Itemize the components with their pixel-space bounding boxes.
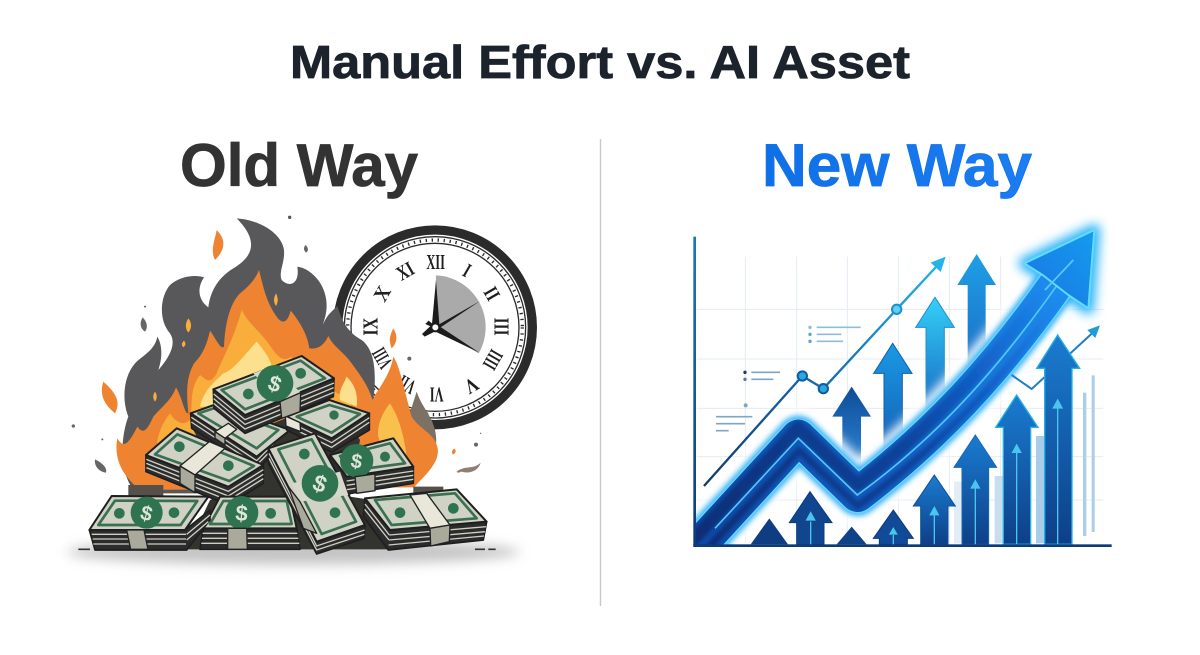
ground shadow	[67, 539, 520, 565]
heading: old way: Old Way	[180, 132, 419, 199]
clock numerals: XII	[426, 252, 445, 274]
arrow outline	[693, 285, 1056, 552]
clock numerals: IIII	[478, 345, 507, 373]
clock hands	[422, 280, 481, 353]
clock numerals: III	[489, 318, 511, 336]
money stack: bottom center	[200, 496, 300, 549]
illustration: growth chart	[687, 230, 1112, 557]
clock numerals: IX	[360, 318, 382, 336]
inner thin arrows	[807, 400, 1062, 544]
money stack: top: $	[265, 370, 285, 398]
clock numerals: II	[479, 283, 504, 305]
smoke right	[403, 392, 436, 463]
illustration: burning money and clock	[67, 216, 532, 565]
flames	[116, 270, 438, 490]
white halo	[700, 308, 1074, 540]
flying embers and ash	[72, 216, 481, 473]
arrow dark core lower	[705, 328, 1038, 544]
divider	[600, 139, 602, 606]
clock numerals: XI	[393, 258, 418, 286]
rear up arrows	[832, 254, 996, 473]
clock numerals: X	[370, 282, 396, 306]
chart note lines	[716, 326, 861, 431]
arrow body	[693, 285, 1056, 552]
money stack: rear left	[191, 404, 290, 470]
clock numerals: V	[460, 372, 482, 398]
front up arrows	[751, 335, 1080, 544]
pale background bars	[954, 375, 1095, 543]
money stack: middle left	[146, 428, 263, 505]
money stack: middle right	[330, 438, 413, 494]
elapsed time sector	[435, 275, 486, 353]
title: Manual Effort vs. AI Asset	[290, 36, 910, 88]
clock numerals: VI	[430, 383, 444, 405]
cyan glow	[693, 285, 1056, 552]
dark fill between stacks	[187, 400, 390, 549]
money stack: top	[213, 356, 334, 433]
main glowing arrow	[687, 230, 1094, 557]
clock numerals	[360, 252, 511, 405]
money stack: bottom left	[89, 496, 210, 550]
heading: new way: New Way	[762, 132, 1033, 199]
arrow dark core upper	[696, 313, 1030, 544]
second thin trend line	[1012, 325, 1100, 389]
ground strokes	[78, 547, 496, 552]
money stack: leaning center: $	[309, 469, 330, 498]
clock numerals: VII	[395, 370, 420, 398]
money stack: bottom center: $	[234, 500, 249, 526]
money stack: bottom left: $	[138, 501, 155, 527]
smoke	[122, 218, 375, 493]
clock numerals: VIII	[368, 344, 397, 372]
money stack: bottom right	[363, 489, 487, 550]
chart axes	[693, 237, 1112, 547]
chart grid	[697, 257, 1103, 543]
icon: wall clock	[338, 230, 532, 425]
arrowhead glow	[1024, 230, 1094, 308]
back plate behind money	[128, 485, 443, 500]
thin trend line with nodes	[704, 257, 946, 486]
money stack: middle right: $	[349, 450, 364, 474]
money stack: rear right	[285, 400, 369, 452]
clock numerals: I	[459, 260, 474, 282]
arrowhead	[1024, 230, 1094, 308]
inner highlight	[714, 286, 1056, 529]
money stack: leaning center	[268, 433, 365, 554]
head streak	[1045, 260, 1073, 290]
